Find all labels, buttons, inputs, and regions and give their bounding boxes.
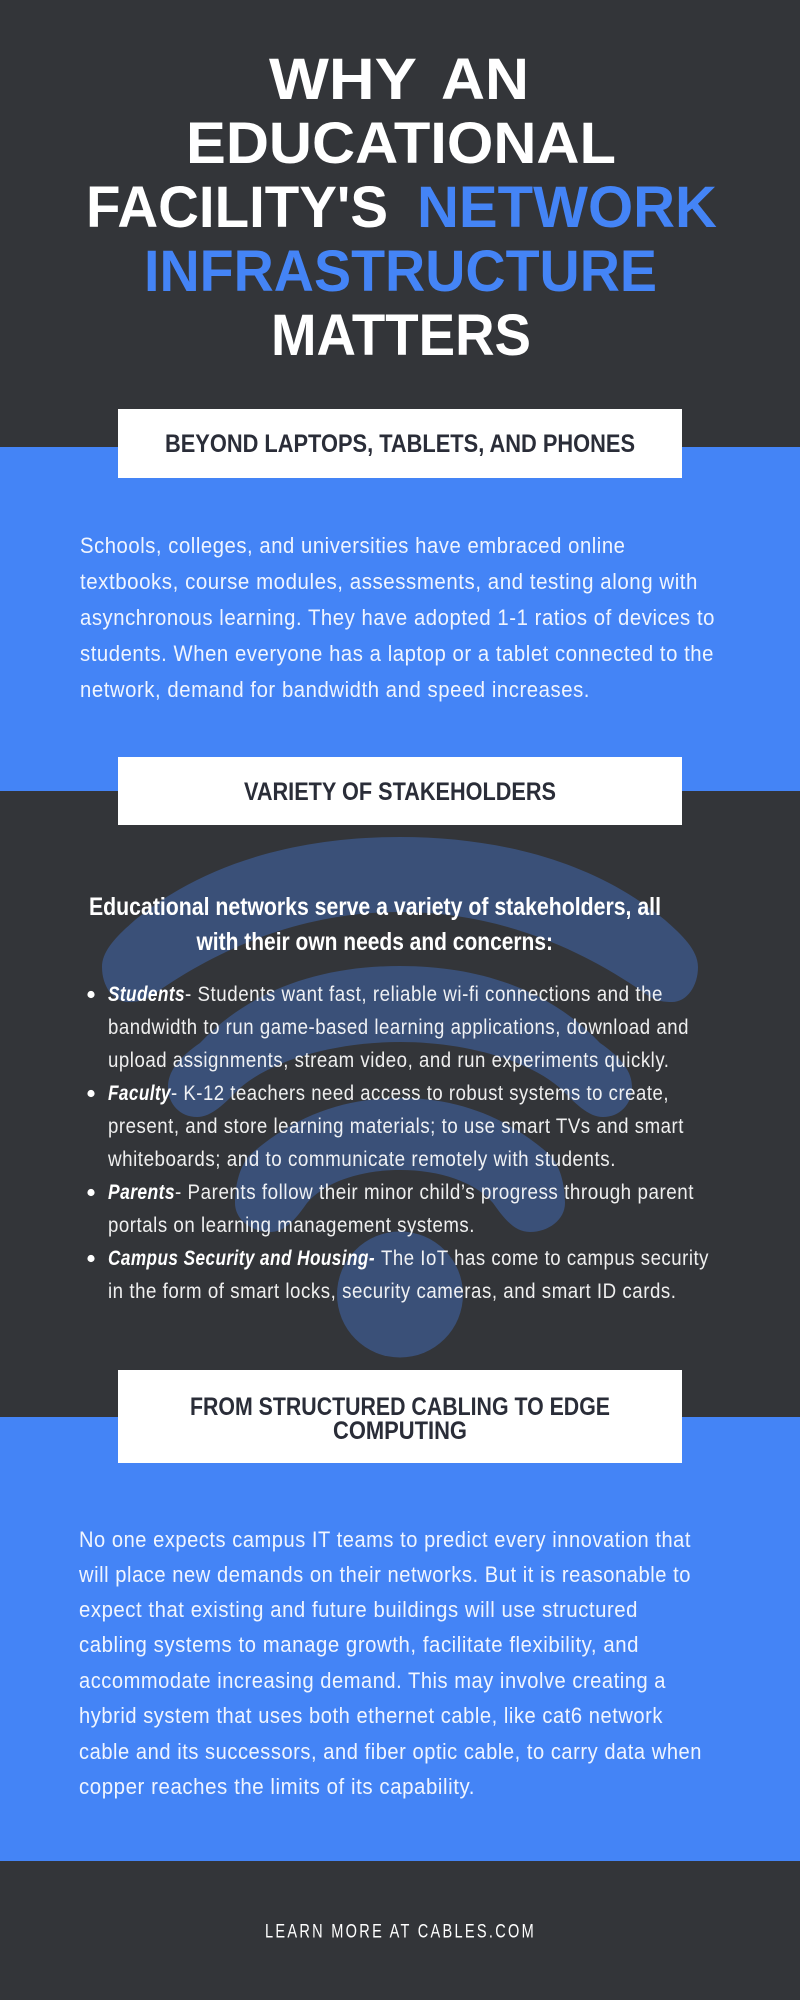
body text: structured cabling: cabling systems to manage growth, facilitate flexibility, and <box>79 1632 639 1657</box>
body text: beyond laptops: asynchronous learning. They have adopted 1-1 ratios of devices to <box>80 605 715 630</box>
list item: parents <box>87 1181 694 1237</box>
list item: parents: - Parents follow their minor child’s progress through parent <box>175 1181 694 1204</box>
body text: beyond laptops: Schools, colleges, and universities have embraced online <box>80 533 626 558</box>
body text: beyond laptops: textbooks, course modules, assessments, and testing along with <box>80 569 698 594</box>
heading box: variety of stakeholders: VARIETY OF STAKEHOLDERS <box>244 778 556 806</box>
list item: students: Students <box>108 983 185 1006</box>
title: MATTERS <box>271 303 531 368</box>
title <box>86 47 717 368</box>
body text: structured cabling: accommodate increasing demand. This may involve creating a <box>79 1668 666 1693</box>
body text: structured cabling <box>78 1527 702 1799</box>
list item: faculty: - K-12 teachers need access to robust systems to create, <box>171 1082 669 1105</box>
list item: parents: Parents <box>108 1181 175 1204</box>
body text: structured cabling: will place new demands on their networks. But it is reasonable to <box>78 1562 691 1587</box>
list item: campus security <box>87 1247 709 1303</box>
list item: campus security: Campus Security and Housing- <box>108 1247 375 1270</box>
list item: students <box>87 983 689 1072</box>
footer: learn more: LEARN MORE AT CABLES.COM <box>265 1922 536 1942</box>
heading box: beyond laptops <box>118 409 682 478</box>
heading box: variety of stakeholders <box>118 757 682 825</box>
subheading: stakeholders intro <box>89 893 661 956</box>
body text: beyond laptops <box>80 533 715 702</box>
list item: students: - Students want fast, reliable wi-fi connections and the <box>185 983 663 1006</box>
list item: faculty: Faculty <box>108 1082 172 1105</box>
body text: structured cabling: expect that existing and future buildings will use structured <box>79 1597 638 1622</box>
list item: parents: portals on learning management systems. <box>108 1214 475 1237</box>
body text: beyond laptops: students. When everyone has a laptop or a tablet connected to the <box>80 641 714 666</box>
body text: structured cabling: No one expects campus IT teams to predict every innovation that <box>79 1527 691 1552</box>
title: INFRASTRUCTURE <box>144 239 657 304</box>
list item: faculty <box>87 1082 684 1171</box>
list item: students: upload assignments, stream video, and run experiments quickly. <box>108 1049 670 1072</box>
subheading: stakeholders intro: Educational networks serve a variety of stakeholders, all <box>89 893 661 921</box>
title: AN <box>441 47 529 112</box>
panel: structured cabling <box>0 1370 800 1861</box>
heading box: beyond laptops: BEYOND LAPTOPS, TABLETS, AND PHONES <box>165 430 635 458</box>
body text: beyond laptops: network, demand for bandwidth and speed increases. <box>80 677 590 702</box>
list item: faculty: present, and store learning materials; to use smart TVs and smart <box>108 1115 684 1138</box>
body text: structured cabling: copper reaches the limits of its capability. <box>79 1774 475 1799</box>
list item: faculty: whiteboards; and to communicate remotely with students. <box>107 1148 616 1171</box>
subheading: stakeholders intro: with their own needs and concerns: <box>196 928 553 956</box>
heading box: structured cabling <box>118 1370 682 1463</box>
heading box: structured cabling: COMPUTING <box>333 1417 467 1445</box>
title: NETWORK <box>417 175 717 240</box>
list item: campus security: in the form of smart locks, security cameras, and smart ID cards. <box>108 1280 676 1303</box>
list item: students: bandwidth to run game-based learning applications, download and <box>108 1016 689 1039</box>
title: EDUCATIONAL <box>186 111 616 176</box>
title: WHY <box>269 47 417 112</box>
title: FACILITY'S <box>86 175 388 240</box>
list item: campus security: The IoT has come to campus security <box>381 1247 709 1270</box>
list: stakeholders <box>87 983 709 1303</box>
panel: beyond laptops <box>0 409 800 791</box>
body text: structured cabling: hybrid system that uses both ethernet cable, like cat6 network <box>79 1703 663 1728</box>
heading box: structured cabling: FROM STRUCTURED CABLING TO EDGE <box>190 1393 610 1421</box>
body text: structured cabling: cable and its successors, and fiber optic cable, to carry data when <box>79 1739 702 1764</box>
icon: wifi watermark <box>102 837 698 1358</box>
